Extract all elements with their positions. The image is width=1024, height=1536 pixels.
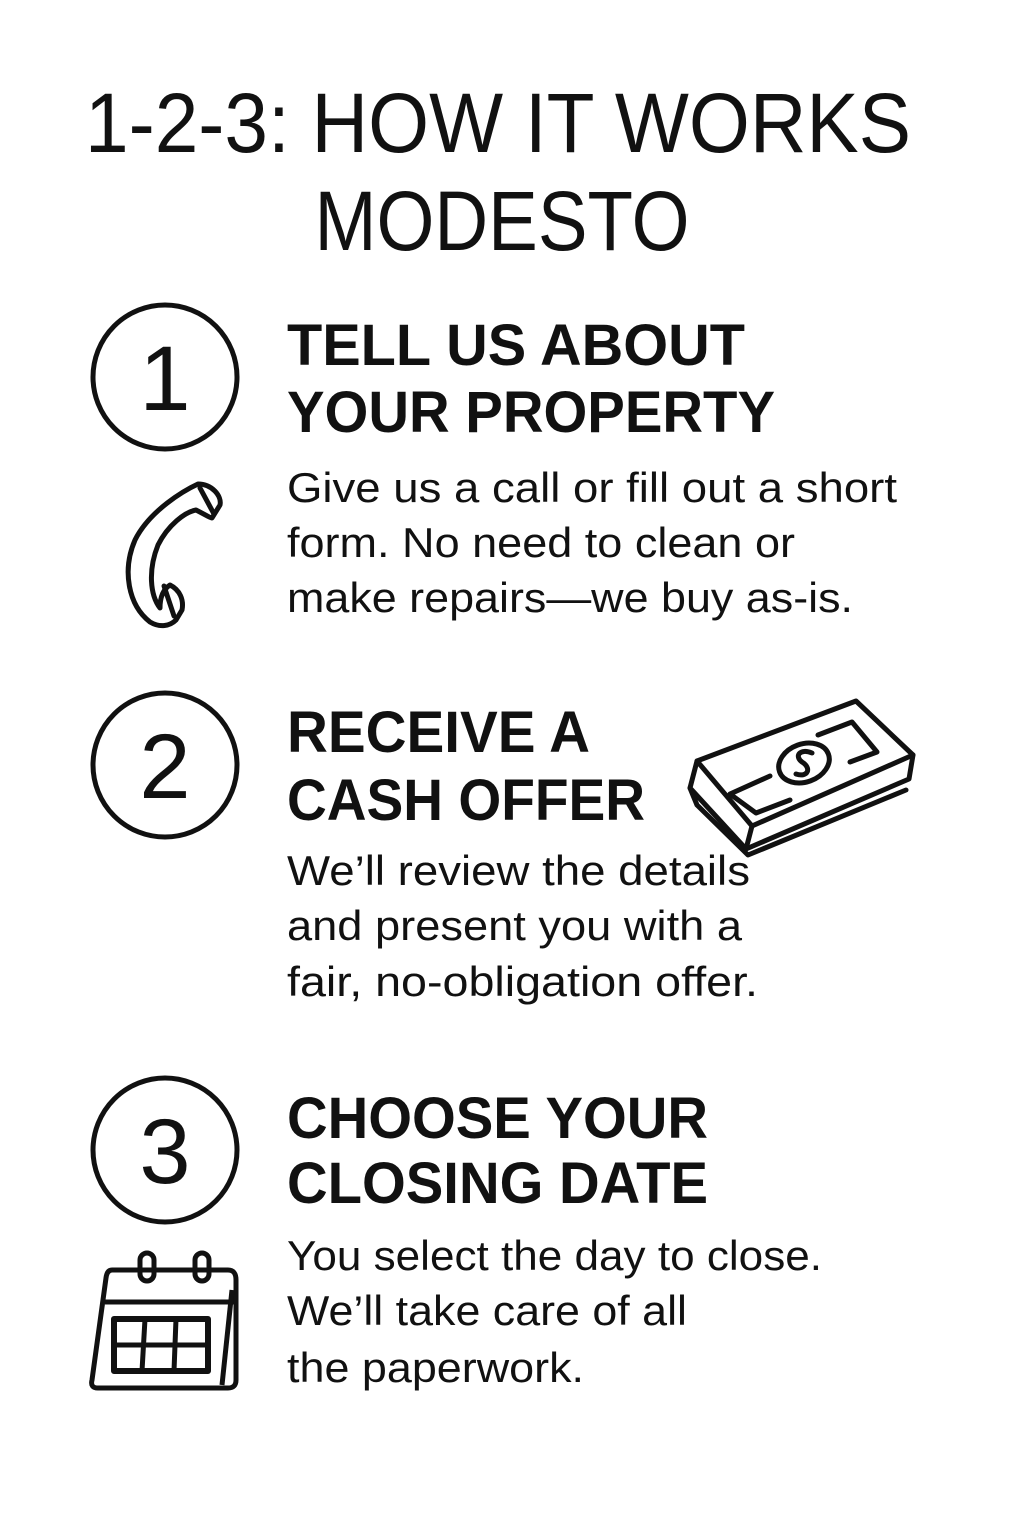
body 1 xyxy=(287,464,897,621)
number circle 2 xyxy=(93,693,237,837)
heading 3: CHOOSE YOUR xyxy=(287,1086,708,1151)
heading 2: RECEIVE A xyxy=(287,700,590,765)
body 2: fair, no-obligation offer. xyxy=(287,958,758,1005)
number circle 1: 1 xyxy=(139,328,191,430)
heading 2 xyxy=(287,700,645,833)
body 2: and present you with a xyxy=(287,902,743,949)
body 3 xyxy=(287,1232,822,1391)
body 3: We’ll take care of all xyxy=(287,1287,687,1334)
number circle 3 xyxy=(93,1078,237,1222)
title: MODESTO xyxy=(314,174,690,268)
body 2: We’ll review the details xyxy=(287,847,750,894)
step 1 xyxy=(93,305,897,626)
icon: calendar xyxy=(92,1253,236,1388)
title: 1-2-3: HOW IT WORKS xyxy=(85,76,911,170)
heading 3 xyxy=(287,1086,708,1216)
body 1: make repairs—we buy as-is. xyxy=(287,574,853,621)
step 2 xyxy=(93,693,913,1005)
body 1: form. No need to clean or xyxy=(287,519,795,566)
body 1: Give us a call or fill out a short xyxy=(287,464,897,511)
icon: phone xyxy=(128,484,220,626)
body 3: the paperwork. xyxy=(287,1344,584,1391)
step 3 xyxy=(92,1078,822,1391)
heading 2: CASH OFFER xyxy=(287,768,645,833)
title xyxy=(85,76,911,268)
body 3: You select the day to close. xyxy=(287,1232,822,1279)
body 2 xyxy=(287,847,758,1005)
heading 1: TELL US ABOUT xyxy=(287,313,745,378)
icon: cash stack xyxy=(690,701,913,855)
number circle 2: 2 xyxy=(139,716,191,818)
number circle 3: 3 xyxy=(139,1101,191,1203)
heading 3: CLOSING DATE xyxy=(287,1151,708,1216)
heading 1 xyxy=(287,313,775,445)
heading 1: YOUR PROPERTY xyxy=(287,380,775,445)
number circle 1 xyxy=(93,305,237,449)
